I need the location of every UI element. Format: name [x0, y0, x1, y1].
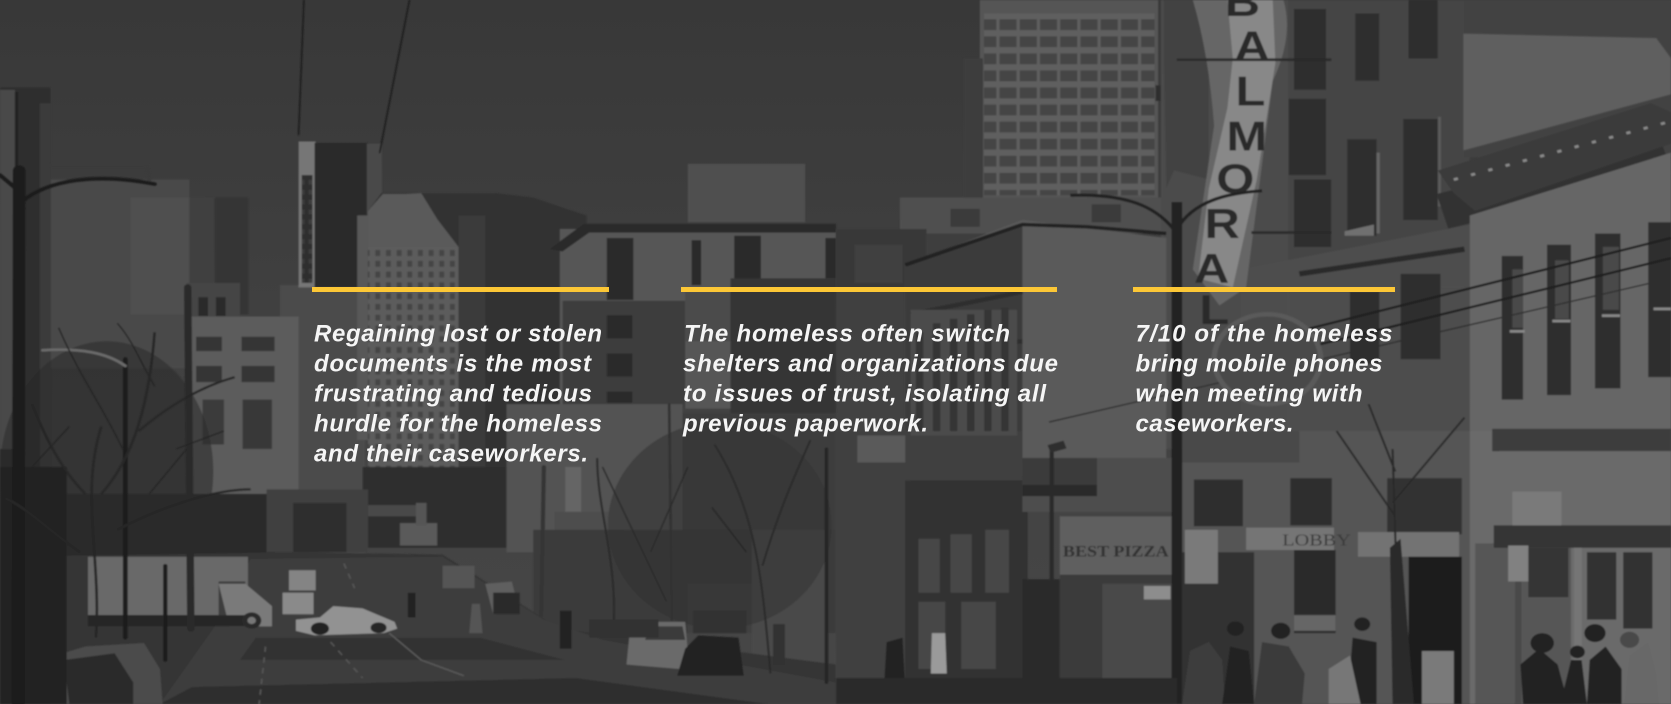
left half of street scene [0, 0, 836, 704]
text block 2: shelters and organizations due [683, 350, 1058, 378]
yellow rule 1 [312, 287, 609, 292]
BALMORAL neon sign: L [1235, 68, 1265, 115]
text block 2: previous paperwork. [682, 410, 928, 438]
pedestrians [884, 617, 1622, 704]
yellow rule 3 [1133, 287, 1395, 292]
BALMORAL neon sign: A [1234, 23, 1270, 70]
text block 1: documents is the most [314, 350, 592, 378]
yellow rule 2 [681, 287, 1057, 292]
text block 1 [314, 320, 602, 468]
pedestrians and shops [589, 611, 785, 665]
text block 1: hurdle for the homeless [314, 410, 602, 438]
text block 2: The homeless often switch [684, 320, 1010, 348]
text block 1: and their caseworkers. [314, 440, 588, 468]
BALMORAL neon sign: M [1226, 113, 1267, 160]
BALMORAL neon sign: L [1199, 287, 1229, 333]
text block 1: Regaining lost or stolen [314, 320, 602, 348]
text block 3: 7/10 of the homeless [1136, 320, 1392, 348]
BALMORAL neon sign: A [1194, 245, 1229, 292]
panel: lost documents [312, 287, 609, 468]
BALMORAL neon sign [1164, 0, 1287, 333]
right half of street scene: LOBBY [1282, 531, 1351, 550]
residential tower [964, 0, 1167, 198]
storefront windows [919, 530, 1009, 669]
text block 2: to issues of trust, isolating all [683, 380, 1047, 408]
text block 3: caseworkers. [1136, 410, 1294, 438]
street tree on right [1337, 404, 1464, 704]
BALMORAL neon sign: O [1216, 156, 1254, 202]
right half of street scene: BEST PIZZA [1063, 543, 1169, 560]
text block 3: when meeting with [1136, 380, 1362, 408]
BALMORAL neon sign: R [1205, 201, 1240, 247]
bare trees on left [5, 323, 251, 638]
text block 3 [1136, 320, 1392, 438]
panel: switching shelters [681, 287, 1058, 438]
text block 3: bring mobile phones [1136, 350, 1382, 378]
text block 2 [682, 320, 1058, 438]
text block 1: frustrating and tedious [314, 380, 592, 408]
right half of street scene [836, 0, 1671, 704]
panel: mobile phones [1133, 287, 1395, 438]
